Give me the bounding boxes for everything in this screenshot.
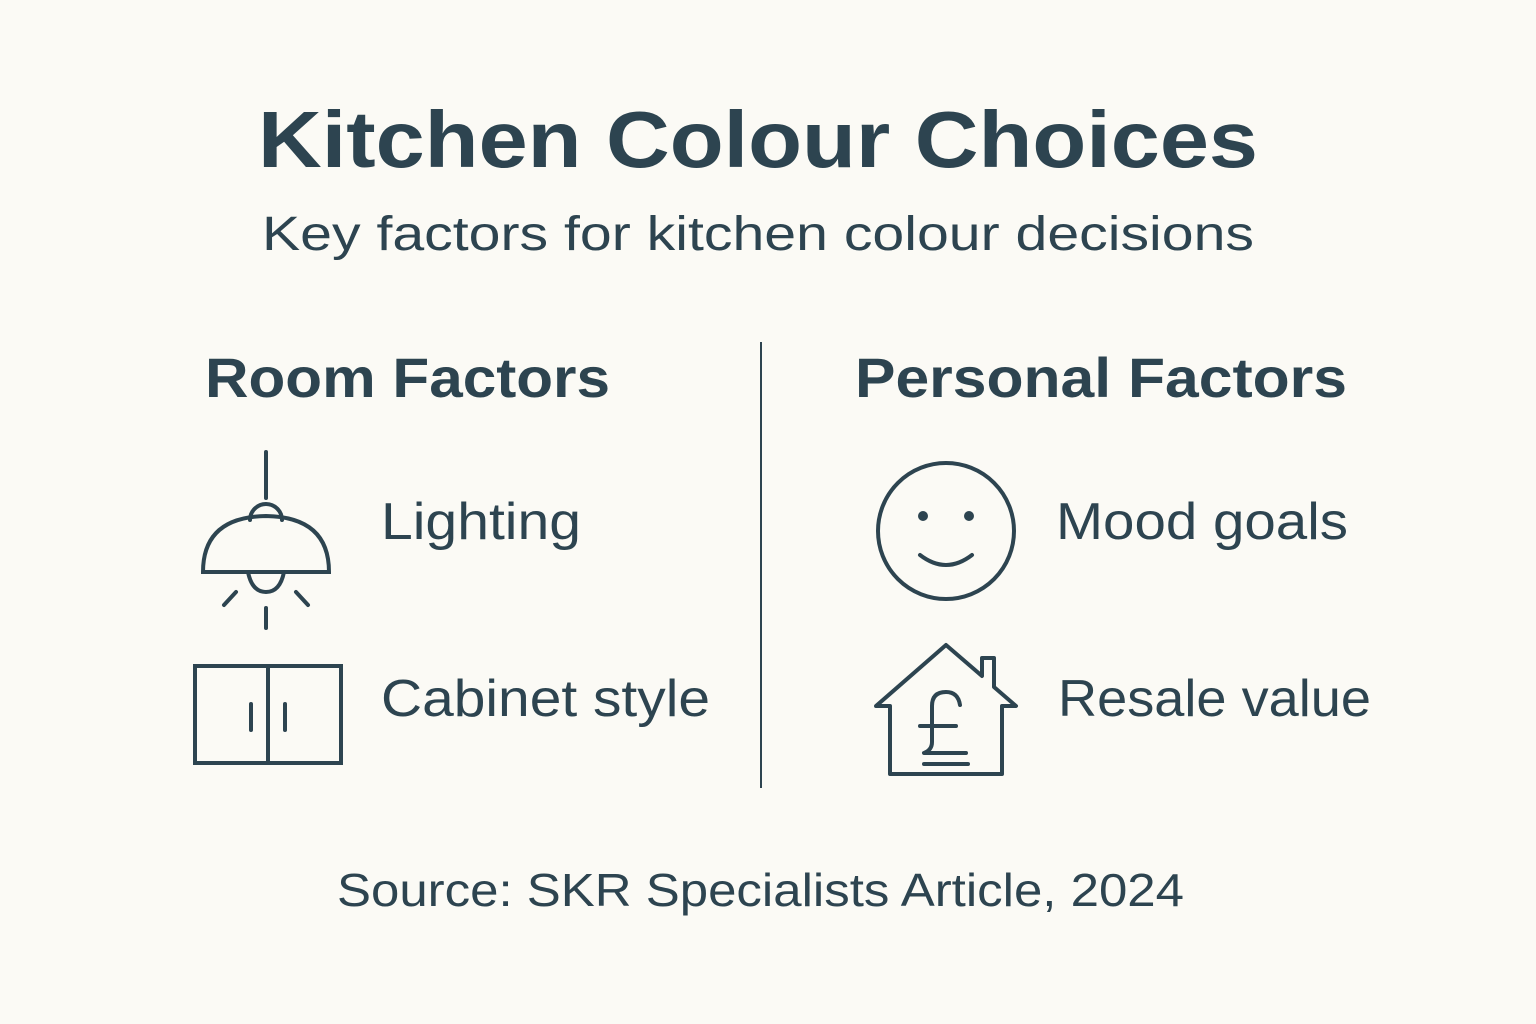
label: Resale value: Resale value xyxy=(1058,670,1371,728)
icon: house with pound xyxy=(876,645,1016,774)
icon: smiley xyxy=(878,463,1014,599)
label: Lighting: Lighting xyxy=(381,493,581,551)
label: Mood goals: Mood goals xyxy=(1056,493,1348,551)
icon: cabinet xyxy=(195,666,341,763)
title: Kitchen Colour Choices xyxy=(258,95,1258,184)
heading: Personal Factors: Personal Factors xyxy=(855,346,1347,409)
icon: pendant lamp xyxy=(203,452,329,628)
label: Cabinet style: Cabinet style xyxy=(381,670,710,728)
subtitle: Key factors for kitchen colour decisions xyxy=(262,208,1254,261)
source: Source: SKR Specialists Article, 2024 xyxy=(337,864,1184,916)
heading: Room Factors: Room Factors xyxy=(205,346,610,409)
